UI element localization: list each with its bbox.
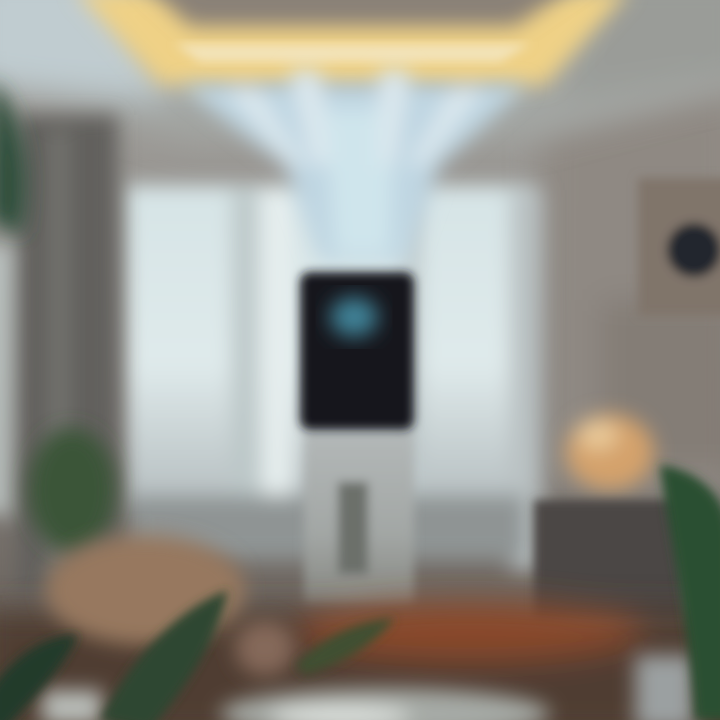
coffee table — [42, 655, 695, 720]
side cabinet — [534, 500, 684, 620]
ceiling — [0, 0, 720, 140]
light inner recess — [135, 0, 590, 26]
left curtain — [0, 115, 118, 595]
lamp — [566, 414, 654, 490]
air flow fan from ceiling — [180, 70, 528, 262]
wall art — [638, 178, 720, 316]
floor and rug — [0, 602, 720, 720]
purifier display glow — [330, 297, 378, 337]
purifier base — [304, 432, 414, 604]
window with curtains — [125, 185, 542, 570]
ceiling light: glowing hexagon — [75, 0, 630, 85]
armchair — [45, 535, 295, 676]
light outer glow — [75, 0, 630, 85]
right wall — [540, 90, 720, 500]
purifier dark screen — [300, 272, 414, 430]
plants on the left — [0, 80, 116, 552]
air purifier — [300, 272, 414, 604]
foreground plants — [0, 465, 720, 720]
light bright band — [175, 44, 530, 62]
